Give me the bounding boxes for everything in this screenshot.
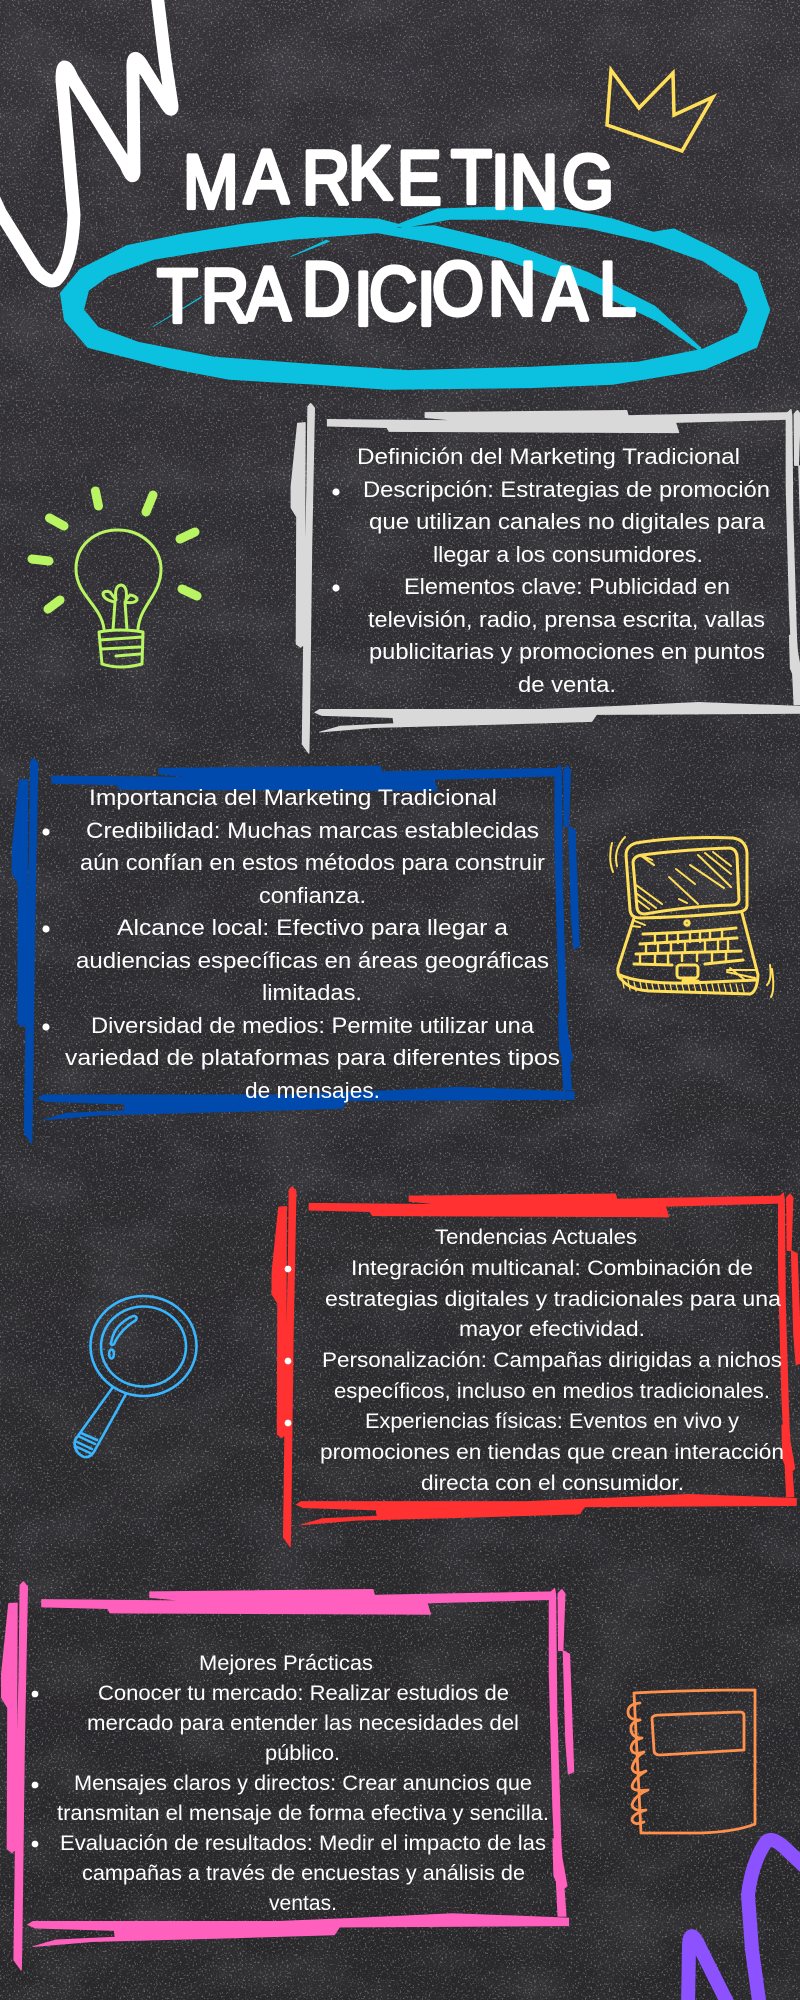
- heading: definition: Definición del Marketing Tradicional: [357, 444, 740, 469]
- body text: Credibilidad: Muchas marcas establecidas: [86, 818, 539, 843]
- bullets: [285, 1266, 291, 1426]
- panel: definition: [291, 403, 800, 753]
- bullets: [42, 828, 50, 1031]
- frame: pink: [2, 1582, 574, 1970]
- body text: confianza.: [259, 883, 366, 908]
- body text: Elementos clave: Publicidad en: [404, 574, 730, 599]
- body text: [363, 477, 770, 697]
- icon: magnifying glass: [75, 1296, 196, 1457]
- heading: trends: Tendencias Actuales: [435, 1226, 637, 1249]
- panel: trends: [272, 1187, 800, 1547]
- body text: que utilizan canales no digitales para: [369, 509, 766, 534]
- bullets: [32, 1691, 38, 1847]
- body text: llegar a los consumidores.: [433, 542, 703, 567]
- body text: limitadas.: [262, 980, 362, 1005]
- body text: Conocer tu mercado: Realizar estudios de: [98, 1682, 509, 1705]
- body text: [57, 1682, 549, 1915]
- body text: público.: [265, 1742, 340, 1765]
- body text: de mensajes.: [245, 1078, 380, 1103]
- body text: promociones en tiendas que crean interacción: [320, 1441, 784, 1464]
- purple squiggle decoration: [688, 1840, 800, 2000]
- icon: crown: [607, 70, 713, 151]
- frame: red: [272, 1187, 800, 1547]
- body text: televisión, radio, prensa escrita, vallas: [368, 607, 765, 632]
- title line: Tradicional: TRADICIONAL: [157, 247, 636, 342]
- icon: laptop: [610, 837, 773, 997]
- heading: importance: Importancia del Marketing Tradicional: [89, 785, 497, 810]
- panel: best practices: [2, 1582, 574, 1970]
- body text: [65, 818, 560, 1103]
- body text: Integración multicanal: Combinación de: [351, 1257, 753, 1280]
- body text: Personalización: Campañas dirigidas a nichos: [322, 1349, 782, 1372]
- body text: Evaluación de resultados: Medir el impacto de las: [60, 1832, 546, 1855]
- icon: light bulb: [32, 491, 197, 667]
- body text: variedad de plataformas para diferentes tipos: [65, 1045, 560, 1070]
- frame: grey: [291, 403, 800, 753]
- body text: Experiencias físicas: Eventos en vivo y: [365, 1410, 740, 1433]
- body text: audiencias específicas en áreas geográficas: [76, 948, 549, 973]
- white squiggle decoration: [0, 0, 172, 281]
- body text: específicos, incluso en medios tradicionales.: [334, 1380, 770, 1403]
- body text: transmitan el mensaje de forma efectiva y sencilla.: [57, 1802, 549, 1825]
- title line: Marketing: MARKETING: [183, 131, 614, 225]
- icon: notebook: [628, 1690, 755, 1833]
- frame: blue: [12, 758, 579, 1143]
- bullets: [332, 488, 340, 592]
- body text: estrategias digitales y tradicionales para una: [325, 1288, 781, 1311]
- title: [157, 131, 636, 342]
- body text: campañas a través de encuestas y análisis de: [82, 1862, 525, 1885]
- body text: aún confían en estos métodos para construir: [80, 850, 545, 875]
- body text: Alcance local: Efectivo para llegar a: [117, 915, 509, 940]
- body text: mercado para entender las necesidades del: [87, 1712, 519, 1735]
- body text: Descripción: Estrategias de promoción: [363, 477, 770, 502]
- cyan hand-drawn ellipse: [62, 208, 768, 388]
- body text: Mensajes claros y directos: Crear anuncios que: [74, 1772, 532, 1795]
- body text: [320, 1257, 784, 1495]
- body text: mayor efectividad.: [459, 1318, 645, 1341]
- body text: ventas.: [269, 1892, 337, 1915]
- body text: de venta.: [518, 672, 616, 697]
- body text: directa con el consumidor.: [421, 1472, 684, 1495]
- body text: publicitarias y promociones en puntos: [369, 639, 765, 664]
- heading: best practices: Mejores Prácticas: [199, 1652, 373, 1675]
- panel: importance: [12, 758, 579, 1143]
- body text: Diversidad de medios: Permite utilizar una: [91, 1013, 535, 1038]
